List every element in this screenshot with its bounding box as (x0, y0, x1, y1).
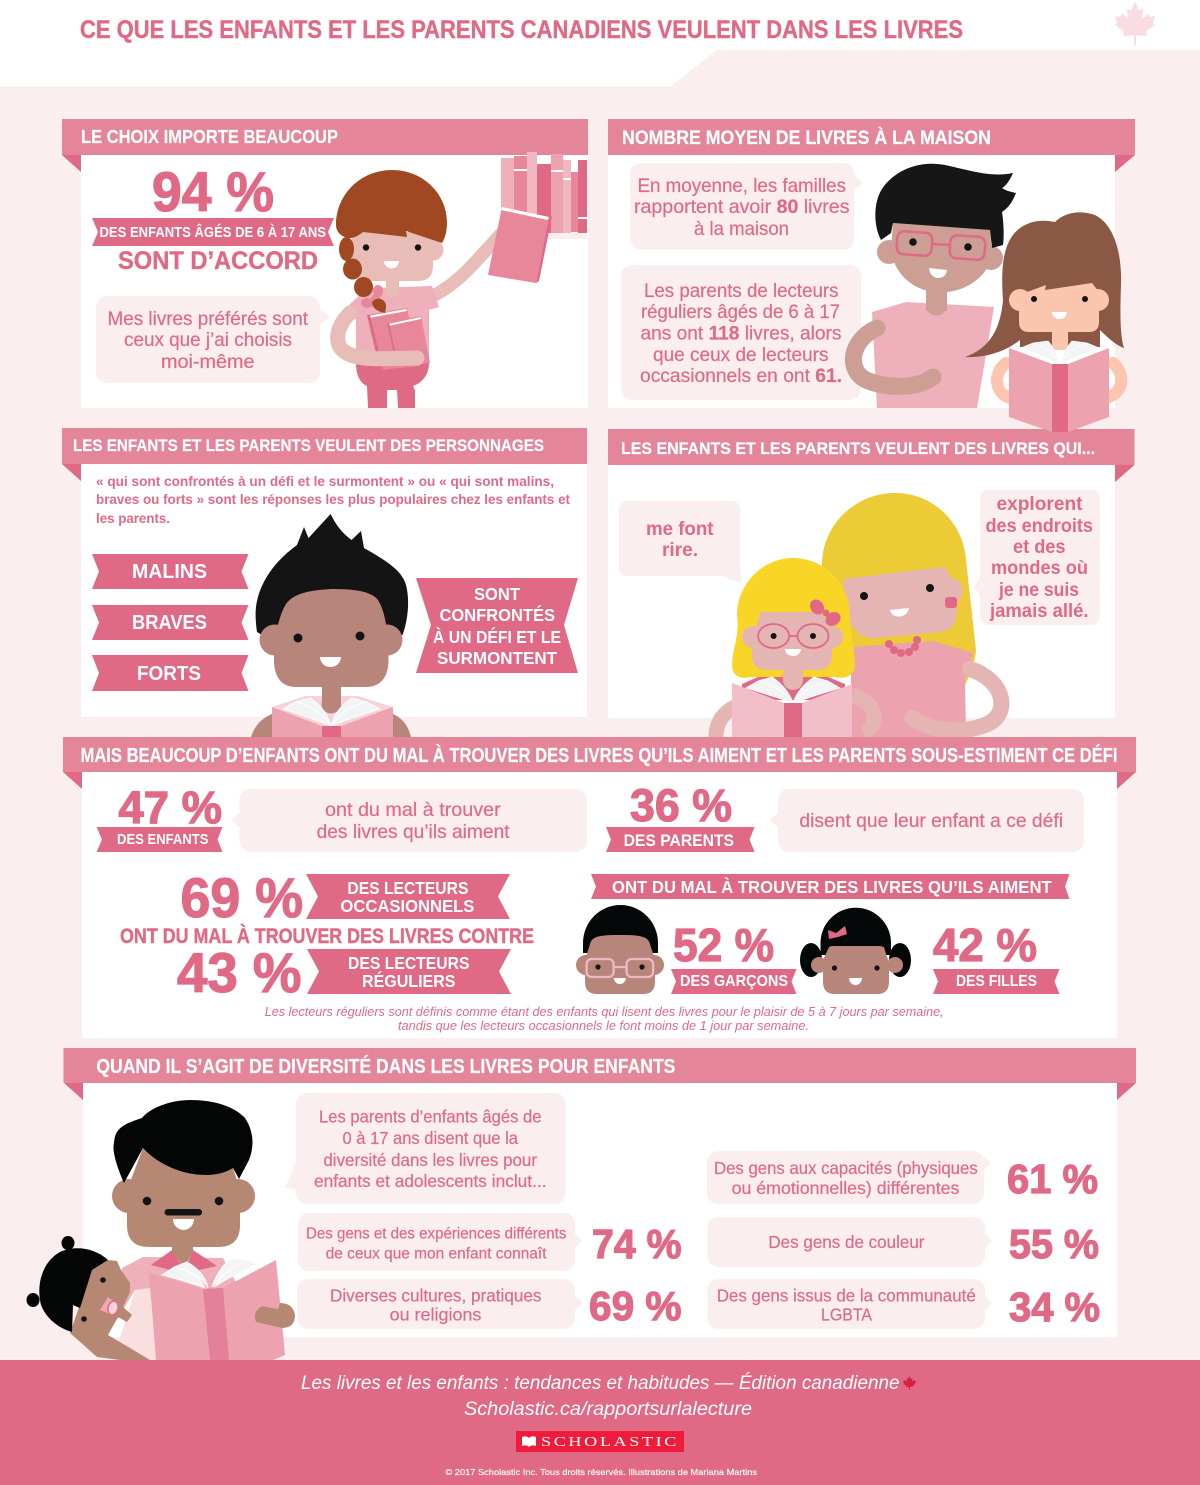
speech bubble: les parents d'enfants: 0 à 17 ans disent que la (342, 1128, 518, 1148)
icon: girl face with bow (800, 908, 911, 994)
text: réponses populaires: braves ou forts » sont les réponses les plus populaires chez les enfants et (96, 492, 570, 507)
speech bubble: disent (769, 789, 1084, 852)
speech bubble: explorent (974, 490, 1100, 625)
row: cultures 69 %: ou religions (390, 1304, 482, 1324)
panel: les enfants et les parents veulent des livres qui (608, 429, 1134, 737)
illustration: girl with brown hair reading (965, 212, 1124, 432)
illustration: father reading with baby (26, 1100, 295, 1360)
callout: parents de lecteurs: réguliers âgés de 6 à 17 (641, 301, 840, 323)
illustration: little girl with glasses reading (716, 558, 874, 737)
text: ont du mal à trouver des livres contre: ONT DU MAL À TROUVER DES LIVRES CONTRE (120, 923, 534, 948)
panel: les enfants et les parents veulent des livres qui: LES ENFANTS ET LES PARENTS VEULENT DES LIVRES QUI... (621, 439, 1095, 458)
speech bubble: en moyenne: En moyenne, les familles (638, 175, 846, 197)
row: cultures 69 %: 69 % (589, 1283, 682, 1329)
speech bubble: en moyenne: rapportent avoir 80 livres (634, 196, 850, 218)
row: cultures 69 %: Diverses cultures, pratiques (330, 1286, 542, 1306)
title: CE QUE LES ENFANTS ET LES PARENTS CANADIENS VEULENT DANS LES LIVRES (80, 16, 963, 44)
stat: 52 % des garçons (671, 919, 796, 994)
speech bubble: me font rire (619, 501, 741, 583)
heading: le choix (62, 119, 588, 155)
speech bubble: me font rire: me font (646, 519, 714, 540)
row: capacités 61 %: ou émotionnelles) différentes (732, 1178, 960, 1198)
stat: 43 % lecteurs réguliers: RÉGULIERS (362, 970, 456, 991)
row: LGBTA 34 % (708, 1279, 1100, 1330)
speech bubble: mes livres: moi-même (161, 351, 254, 373)
panel: les enfants et les parents veulent des personnages (62, 428, 587, 737)
ribbon: des enfants âgés (92, 218, 334, 246)
speech bubble: disent: disent que leur enfant a ce défi (799, 810, 1063, 832)
footer (0, 1360, 1200, 1485)
stat: 42 % des filles: DES FILLES (956, 973, 1037, 990)
row: LGBTA 34 %: LGBTA (821, 1304, 872, 1324)
illustration: girl with books (336, 170, 552, 408)
stat: 47 % des enfants (97, 782, 222, 852)
speech bubble: explorent: mondes où (991, 558, 1088, 579)
speech bubble: me font rire: rire. (662, 540, 698, 561)
stat: 52 % des garçons: DES GARÇONS (680, 973, 788, 990)
speech bubble: en moyenne: à la maison (694, 218, 789, 240)
panel: diversité: QUAND IL S’AGIT DE DIVERSITÉ DANS LES LIVRES POUR ENFANTS (96, 1055, 675, 1078)
row: gens et expériences 74 %: 74 % (592, 1221, 682, 1267)
copyright: © 2017 Scholastic Inc. Tous droits réservés. Illustrations de Mariana Martins (445, 1467, 757, 1477)
speech bubble: mes livres (96, 296, 330, 383)
stat: 69 % lecteurs occasionnels: 69 % (180, 866, 303, 929)
stat: 43 % lecteurs réguliers: 43 % (177, 941, 302, 1004)
stat: 69 % lecteurs occasionnels: DES LECTEURS (347, 878, 468, 898)
text: réponses populaires (96, 474, 570, 526)
footer title: Les livres et les enfants : tendances et habitudes — Édition canadienne (301, 1373, 900, 1394)
ribbon: forts (92, 655, 248, 691)
stat: 42 % des filles: 42 % (933, 919, 1037, 971)
stat: 47 % des enfants: DES ENFANTS (117, 832, 209, 848)
icon: boy face with glasses (576, 905, 664, 994)
row: LGBTA 34 %: Des gens issus de la communauté (717, 1286, 976, 1306)
stat: 36 % des parents: DES PARENTS (624, 832, 734, 850)
speech bubble: mes livres: Mes livres préférés sont (108, 308, 309, 330)
stat: 42 % des filles (933, 919, 1060, 994)
speech bubble: les parents d'enfants: enfants et adolescents inclut... (314, 1171, 546, 1191)
icon: maple leaf (1115, 1, 1155, 45)
callout: parents de lecteurs: que ceux de lecteurs (653, 344, 829, 366)
stat: 94 %: 94 % (152, 160, 274, 223)
ribbon: sont confrontés: À UN DÉFI ET LE (433, 626, 561, 647)
row: gens et expériences 74 %: de ceux que mon enfant connaît (326, 1246, 547, 1262)
speech bubble: explorent: jamais allé. (989, 601, 1088, 622)
row: LGBTA 34 %: 34 % (1009, 1284, 1100, 1330)
ribbon: malins (92, 554, 248, 589)
stat: 52 % des garçons: 52 % (673, 919, 774, 971)
heading: livres qui (608, 429, 1134, 465)
text: réponses populaires: « qui sont confrontés à un défi et le surmontent » ou « qui sont malins, (96, 474, 554, 489)
speech bubble: mes livres: ceux que j’ai choisis (124, 329, 292, 351)
row: cultures 69 % (297, 1279, 682, 1329)
illustration: father with glasses (853, 164, 1016, 408)
panel: nombre moyen de livres à la maison: NOMBRE MOYEN DE LIVRES À LA MAISON (622, 126, 991, 149)
row: gens et expériences 74 % (298, 1213, 682, 1271)
row: capacités 61 % (707, 1151, 1098, 1204)
speech bubble: les parents d'enfants: diversité dans les livres pour (323, 1150, 537, 1170)
row: gens de couleur 55 %: 55 % (1009, 1221, 1099, 1267)
panel: diversité (26, 1048, 1136, 1360)
stat: 47 % des enfants: 47 % (118, 782, 222, 833)
ribbon: braves: BRAVES (132, 612, 207, 634)
illustration: mother (822, 493, 1001, 737)
panel: mais beaucoup d'enfants (63, 737, 1136, 1038)
speech bubble: en moyenne (630, 163, 863, 250)
illustration: bookshelf (501, 152, 587, 239)
panel: les enfants et les parents veulent des personnages: LES ENFANTS ET LES PARENTS VEULENT DES PERSONNAGES (73, 436, 544, 455)
panel: nombre moyen de livres à la maison (608, 119, 1135, 432)
stat: 36 % des parents: 36 % (630, 780, 732, 831)
ribbon: sont confrontés (416, 578, 578, 673)
callout: parents de lecteurs: occasionnels en ont 61. (640, 365, 842, 387)
heading: mais beaucoup (63, 737, 1136, 772)
row: gens de couleur 55 % (708, 1217, 1099, 1267)
ribbon: braves (92, 605, 248, 640)
footnote: tandis que les lecteurs occasionnels le font moins de 1 jour par semaine. (398, 1018, 809, 1033)
stat: 69 % lecteurs occasionnels (180, 866, 510, 929)
ribbon: ont du mal (garçons et filles): ONT DU MAL À TROUVER DES LIVRES QU’ILS AIMENT (612, 876, 1052, 897)
speech bubble: les parents d'enfants (285, 1093, 566, 1204)
footer url: Scholastic.ca/rapportsurlalecture (464, 1399, 752, 1420)
panel: le choix importe beaucoup: LE CHOIX IMPORTE BEAUCOUP (81, 127, 338, 147)
callout: parents de lecteurs (621, 265, 861, 400)
ribbon: forts: FORTS (137, 663, 201, 685)
row: capacités 61 %: 61 % (1007, 1156, 1098, 1202)
callout: parents de lecteurs: ans ont 118 livres, alors (640, 322, 842, 344)
speech bubble: ont du mal à trouver: ont du mal à trouver (325, 799, 501, 821)
text: réponses populaires: les parents. (96, 511, 170, 526)
callout: parents de lecteurs: Les parents de lecteurs (644, 280, 839, 302)
stat: 43 % lecteurs réguliers: DES LECTEURS (348, 953, 470, 973)
speech bubble: ont du mal à trouver (231, 789, 587, 852)
heading: diversité (64, 1048, 1136, 1083)
ribbon: sont confrontés: CONFRONTÉS (440, 604, 555, 625)
speech bubble: ont du mal à trouver: des livres qu’ils aiment (317, 821, 510, 843)
stat: 69 % lecteurs occasionnels: OCCASIONNELS (340, 896, 474, 916)
heading: personnages (62, 428, 587, 464)
ribbon: malins: MALINS (132, 561, 207, 583)
heading: nombre moyen (608, 119, 1135, 155)
ribbon: sont confrontés: SURMONTENT (437, 648, 557, 668)
icon: red maple leaf (903, 1376, 916, 1390)
speech bubble: les parents d'enfants: Les parents d’enfants âgés de (319, 1107, 542, 1127)
top white title band (0, 0, 1200, 86)
stat: 43 % lecteurs réguliers (177, 941, 511, 1004)
logo: scholastic (516, 1431, 684, 1452)
speech bubble: explorent: et des (1013, 537, 1066, 558)
stat: 36 % des parents (606, 780, 755, 852)
footnote (265, 1004, 944, 1033)
row: gens de couleur 55 %: Des gens de couleur (768, 1232, 925, 1252)
row: gens et expériences 74 %: Des gens et des expériences différents (306, 1226, 567, 1242)
text: sont d'accord: SONT D’ACCORD (118, 247, 318, 275)
logo: scholastic: SCHOLASTIC (541, 1435, 679, 1450)
ribbon: sont confrontés: SONT (474, 584, 520, 604)
speech bubble: explorent: des endroits (986, 516, 1093, 537)
illustration: boy with spiky hair reading (251, 514, 411, 737)
speech bubble: explorent: je ne suis (998, 580, 1079, 601)
row: capacités 61 %: Des gens aux capacités (physiques (714, 1158, 978, 1178)
footnote: Les lecteurs réguliers sont définis comme étant des enfants qui lisent des livres pour le plaisir de 5 à 7 jours par semaine, (265, 1004, 944, 1019)
panel: le choix importe beaucoup (62, 119, 588, 408)
ribbon: des enfants âgés: DES ENFANTS ÂGÉS DE 6 À 17 ANS (100, 223, 326, 241)
speech bubble: explorent: explorent (996, 494, 1083, 515)
